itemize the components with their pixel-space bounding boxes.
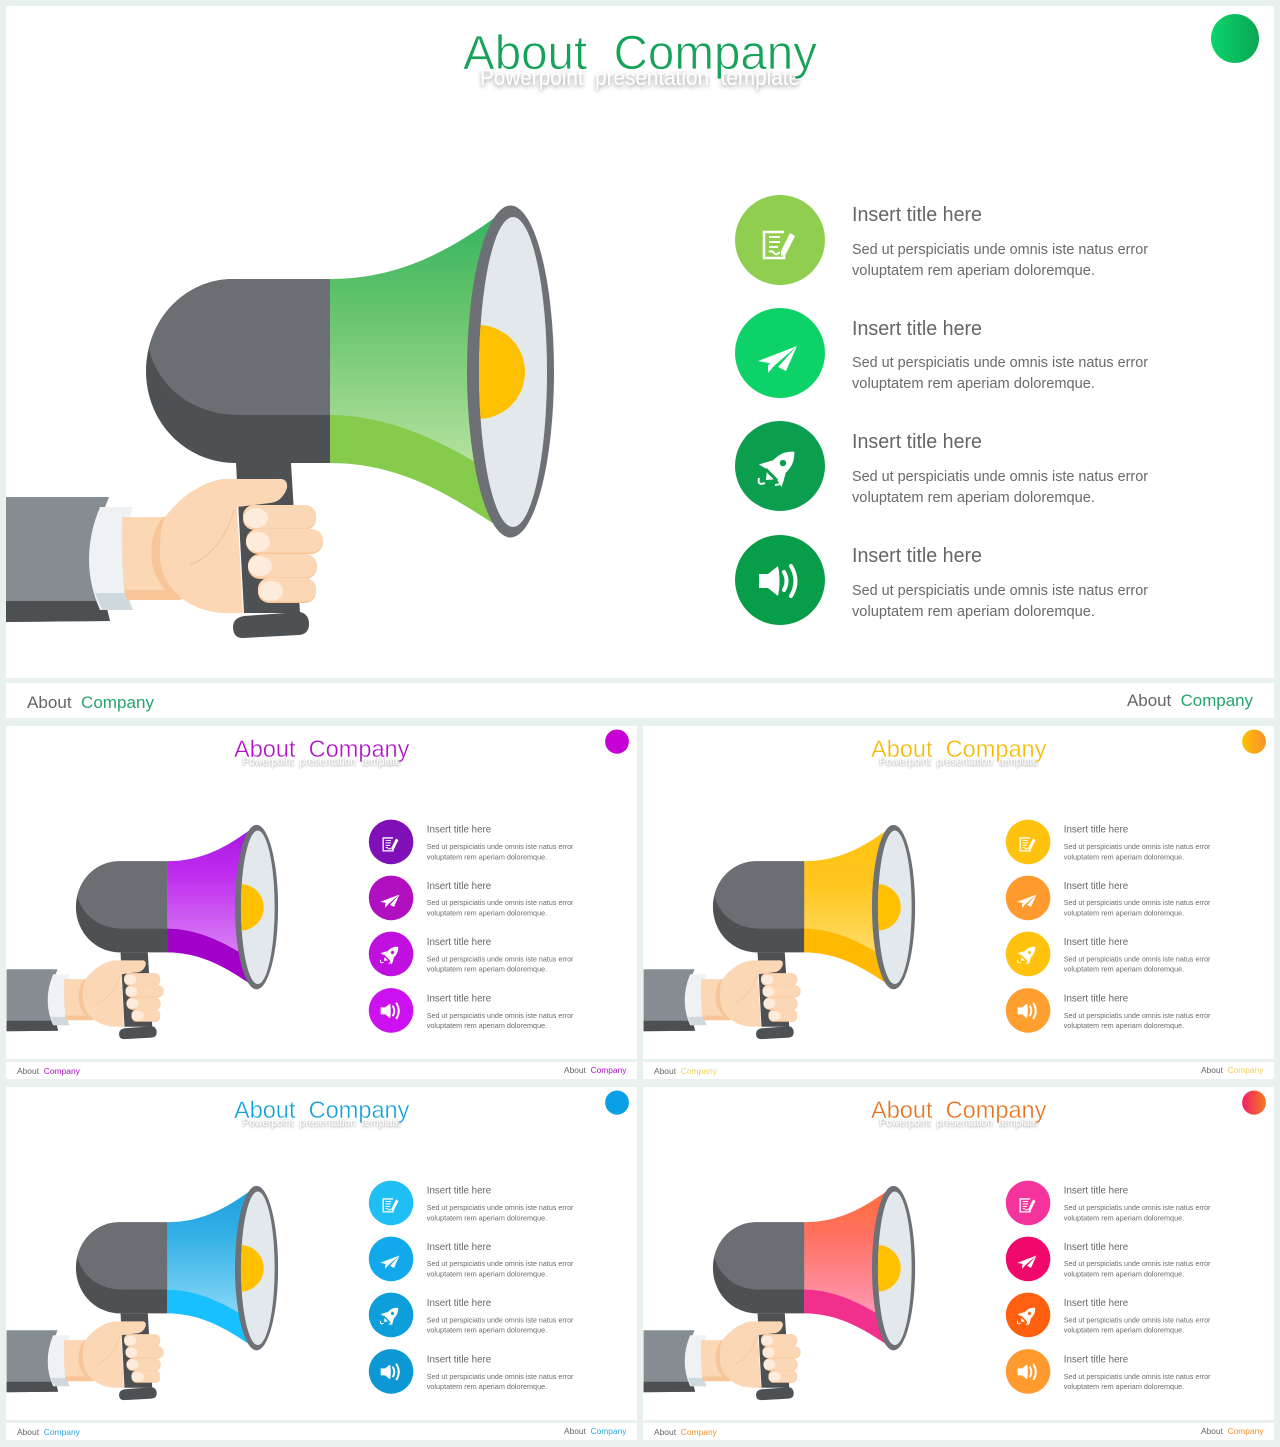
footer right: About Company: [1201, 1426, 1264, 1436]
title: About Company: [463, 27, 817, 80]
item 1: [1006, 1181, 1211, 1225]
footer left: About Company: [654, 1066, 718, 1076]
item 3: [735, 421, 1148, 511]
item 2: voluptatem rem aperiam doloremque.: [427, 909, 547, 917]
item 1: Insert title here: [1064, 825, 1129, 836]
item 3: voluptatem rem aperiam doloremque.: [1064, 966, 1184, 974]
footer left: About Company: [17, 1427, 81, 1437]
footer left: About Company: [27, 693, 154, 712]
item 4: voluptatem rem aperiam doloremque.: [427, 1383, 547, 1391]
item 3: Insert title here: [1064, 1298, 1129, 1309]
slide contents: [644, 1090, 1266, 1437]
footer right: About Company: [1201, 1065, 1264, 1075]
accent dot: [1242, 729, 1266, 754]
item 4: [369, 988, 574, 1033]
subtitle: Powerpoint presentation template: [242, 1117, 401, 1129]
item 2: Sed ut perspiciatis unde omnis iste natus error: [852, 355, 1148, 371]
item 2: [1006, 1237, 1211, 1281]
item 1: [369, 820, 574, 864]
item 2: Insert title here: [427, 1242, 492, 1253]
slide contents: [7, 1090, 629, 1437]
item 4: Sed ut perspiciatis unde omnis iste natus error: [852, 583, 1148, 599]
item 3: Insert title here: [852, 431, 982, 453]
subtitle: Powerpoint presentation template: [879, 1117, 1038, 1129]
item 3: voluptatem rem aperiam doloremque.: [427, 966, 547, 974]
item 3: voluptatem rem aperiam doloremque.: [852, 490, 1095, 506]
item 4: Sed ut perspiciatis unde omnis iste natus error: [1064, 1373, 1211, 1381]
accent dot: [1211, 14, 1259, 63]
item 1: Insert title here: [1064, 1186, 1129, 1197]
item 1: [369, 1181, 574, 1225]
item 4: [369, 1349, 574, 1394]
megaphone illustration: [7, 825, 278, 1039]
item 2: Insert title here: [1064, 1242, 1129, 1253]
item 4: Sed ut perspiciatis unde omnis iste natus error: [1064, 1012, 1211, 1020]
item 3: [369, 932, 574, 976]
megaphone illustration: [644, 825, 915, 1039]
subtitle: Powerpoint presentation template: [242, 756, 401, 768]
item 1: Sed ut perspiciatis unde omnis iste natus error: [1064, 843, 1211, 851]
item 1: [735, 195, 1148, 285]
item 2: [1006, 876, 1211, 920]
item 4: Sed ut perspiciatis unde omnis iste natus error: [427, 1373, 574, 1381]
item 3: [1006, 1293, 1211, 1337]
item 3: Sed ut perspiciatis unde omnis iste natus error: [427, 1316, 574, 1324]
item 1: Sed ut perspiciatis unde omnis iste natus error: [427, 843, 574, 851]
item 3: voluptatem rem aperiam doloremque.: [427, 1327, 547, 1335]
item 2: Insert title here: [1064, 881, 1129, 892]
item 2: Sed ut perspiciatis unde omnis iste natus error: [427, 1260, 574, 1268]
subtitle: Powerpoint presentation template: [480, 65, 800, 90]
item 4: [1006, 1349, 1211, 1394]
item 1: voluptatem rem aperiam doloremque.: [427, 1214, 547, 1222]
panel: red slide: [643, 1087, 1274, 1440]
item 1: Sed ut perspiciatis unde omnis iste natus error: [852, 242, 1148, 258]
item 3: [1006, 932, 1211, 976]
title: About Company: [234, 736, 410, 763]
item 3: Sed ut perspiciatis unde omnis iste natus error: [427, 955, 574, 963]
panel: blue slide: [6, 1087, 637, 1440]
item 2: voluptatem rem aperiam doloremque.: [1064, 1270, 1184, 1278]
item 1: [1006, 820, 1211, 864]
megaphone illustration: [644, 1186, 915, 1400]
item 3: voluptatem rem aperiam doloremque.: [1064, 1327, 1184, 1335]
item 1: voluptatem rem aperiam doloremque.: [427, 853, 547, 861]
title: About Company: [234, 1097, 410, 1124]
item 1: Insert title here: [427, 1186, 492, 1197]
item 2: [369, 1237, 574, 1281]
item 2: voluptatem rem aperiam doloremque.: [1064, 909, 1184, 917]
item 2: Sed ut perspiciatis unde omnis iste natus error: [1064, 1260, 1211, 1268]
item 3: Insert title here: [1064, 937, 1129, 948]
item 2: voluptatem rem aperiam doloremque.: [427, 1270, 547, 1278]
item 4: voluptatem rem aperiam doloremque.: [427, 1022, 547, 1030]
item 4: [735, 535, 1148, 625]
item 3: Sed ut perspiciatis unde omnis iste natus error: [1064, 1316, 1211, 1324]
item 1: Sed ut perspiciatis unde omnis iste natus error: [427, 1204, 574, 1212]
megaphone illustration: [6, 206, 554, 638]
subtitle: Powerpoint presentation template: [879, 756, 1038, 768]
item 3: Sed ut perspiciatis unde omnis iste natus error: [852, 469, 1148, 485]
accent dot: [605, 1090, 629, 1115]
item 4: Sed ut perspiciatis unde omnis iste natus error: [427, 1012, 574, 1020]
item 1: voluptatem rem aperiam doloremque.: [1064, 853, 1184, 861]
item 4: Insert title here: [1064, 1354, 1129, 1365]
item 3: Insert title here: [427, 1298, 492, 1309]
title: About Company: [871, 1097, 1047, 1124]
slide contents: [644, 729, 1266, 1076]
accent dot: [605, 729, 629, 754]
item 4: voluptatem rem aperiam doloremque.: [852, 604, 1095, 620]
item 4: Insert title here: [427, 993, 492, 1004]
item 2: [735, 308, 1148, 398]
item 1: voluptatem rem aperiam doloremque.: [1064, 1214, 1184, 1222]
item 4: voluptatem rem aperiam doloremque.: [1064, 1022, 1184, 1030]
item 2: Sed ut perspiciatis unde omnis iste natus error: [427, 899, 574, 907]
slide contents: [7, 729, 629, 1076]
footer left: About Company: [654, 1427, 718, 1437]
megaphone illustration: [7, 1186, 278, 1400]
item 4: Insert title here: [427, 1354, 492, 1365]
panel: yellow slide: [643, 726, 1274, 1079]
footer right: About Company: [564, 1426, 627, 1436]
accent dot: [1242, 1090, 1266, 1115]
panel: purple slide: [6, 726, 637, 1079]
footer right: About Company: [1127, 691, 1253, 710]
item 1: voluptatem rem aperiam doloremque.: [852, 263, 1095, 279]
footer right: About Company: [564, 1065, 627, 1075]
item 1: Sed ut perspiciatis unde omnis iste natus error: [1064, 1204, 1211, 1212]
item 4: [1006, 988, 1211, 1033]
item 1: Insert title here: [427, 825, 492, 836]
item 2: Insert title here: [852, 318, 982, 340]
item 2: voluptatem rem aperiam doloremque.: [852, 376, 1095, 392]
item 3: Insert title here: [427, 937, 492, 948]
item 4: voluptatem rem aperiam doloremque.: [1064, 1383, 1184, 1391]
panel: main green slide: [6, 6, 1274, 718]
item 2: Insert title here: [427, 881, 492, 892]
item 1: Insert title here: [852, 204, 982, 226]
footer left: About Company: [17, 1066, 81, 1076]
item 2: Sed ut perspiciatis unde omnis iste natus error: [1064, 899, 1211, 907]
item 3: Sed ut perspiciatis unde omnis iste natus error: [1064, 955, 1211, 963]
item 4: Insert title here: [1064, 993, 1129, 1004]
item 3: [369, 1293, 574, 1337]
item 2: [369, 876, 574, 920]
item 4: Insert title here: [852, 545, 982, 567]
title: About Company: [871, 736, 1047, 763]
